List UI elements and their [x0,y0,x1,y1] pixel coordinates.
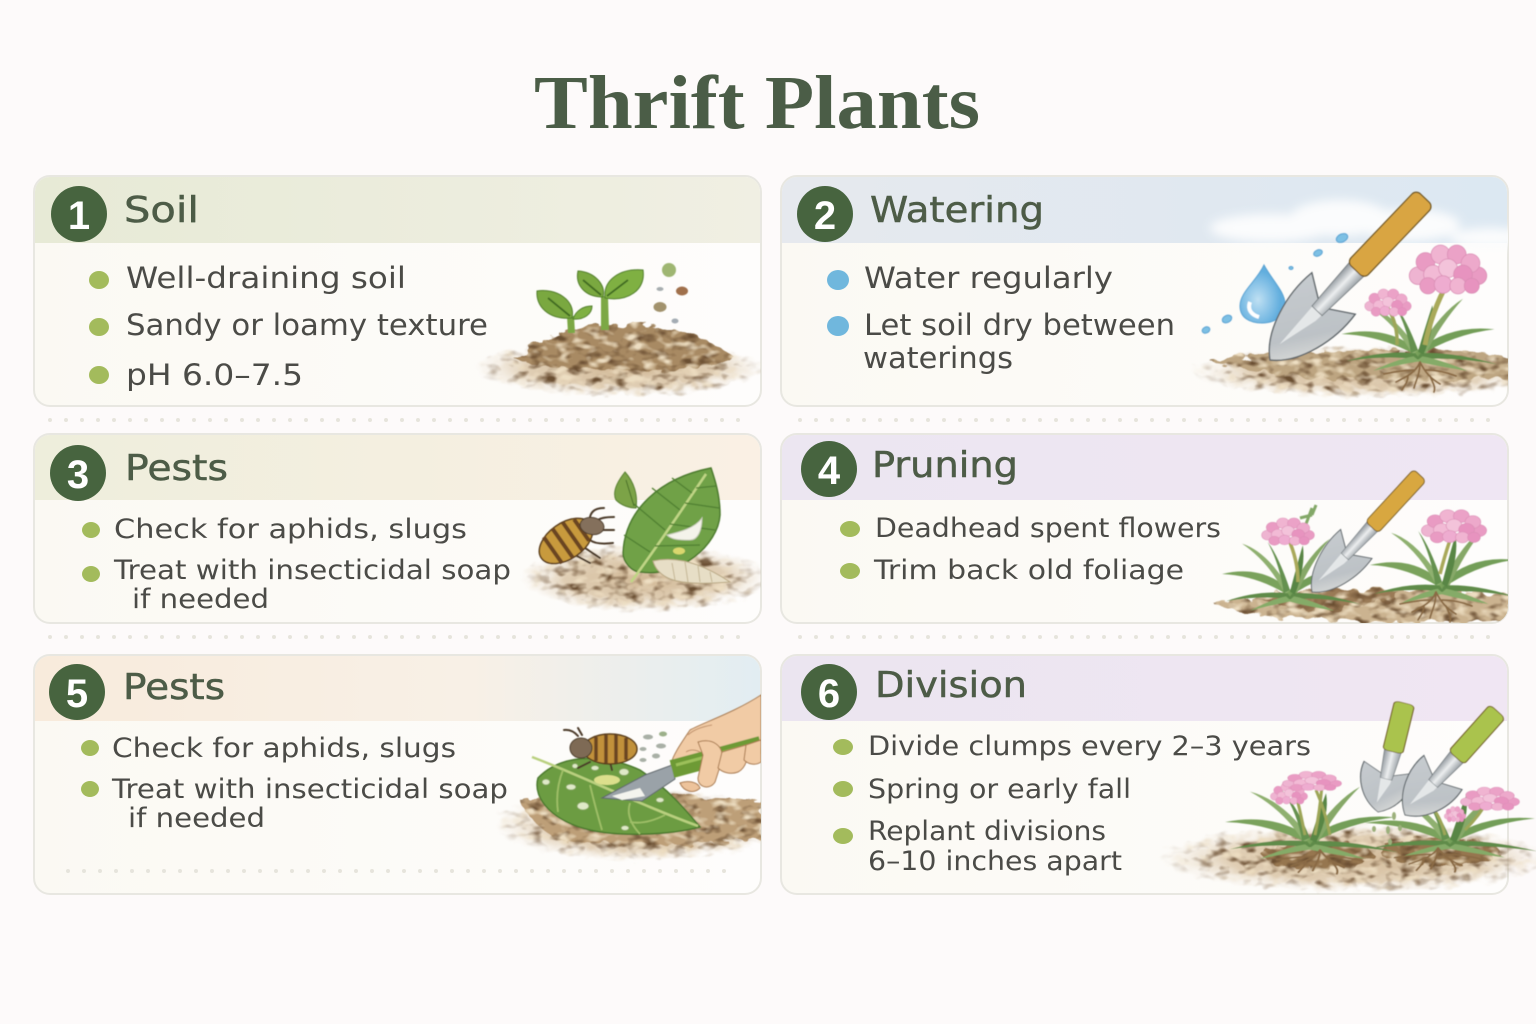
number badge 2 [797,186,853,242]
icon: beetle and chewed leaf [520,468,770,612]
number badge 6 [801,664,857,720]
heading: pruning: Pruning [872,445,1018,486]
number badge 4: 4 [818,449,841,493]
number badge 3 [50,445,106,501]
divider: row two dots [50,635,745,639]
divider: inner dots [68,869,730,873]
heading: soil: Soil [124,190,199,231]
bullet list: soil: Well-draining soil [126,261,406,295]
panel: soil [34,176,766,406]
panel: pests left [34,434,770,623]
bullet list: watering [827,261,1175,375]
number badge 1: 1 [68,194,90,238]
bullet list: division: Divide clumps every 2–3 years [868,731,1311,762]
bullet list: pest treatment: Treat with insecticidal soap [111,774,508,805]
bullet list: soil: Sandy or loamy texture [126,308,488,342]
divider: row one dots [50,418,745,422]
title: Thrift Plants [534,61,980,145]
bullet list: pest treatment: if needed [128,803,265,834]
bullet list: pruning [840,513,1221,586]
number badge 6: 6 [818,672,840,716]
number badge 3: 3 [67,453,89,497]
bullet list: watering: Let soil dry between [864,308,1175,342]
icon: divided thrift clumps with two trowels [1160,694,1536,892]
icon: trowel, water drop and thrift flower [1195,190,1508,400]
number badge 4 [801,441,857,497]
bullet list: soil [89,261,488,392]
number badge 5: 5 [66,672,88,716]
bullet list: division: 6–10 inches apart [868,846,1122,877]
bullet list: division: Replant divisions [868,816,1106,847]
panel: pests right leaf [34,655,785,894]
heading: pests: Pests [125,448,228,489]
panel: watering [781,176,1536,406]
bullet list: division: Spring or early fall [868,774,1131,805]
bullet list: watering: Water regularly [864,261,1113,295]
bullet list: pruning: Trim back old foliage [873,555,1184,586]
bullet list: pest treatment [81,733,508,834]
icon: seedling on soil mound [474,263,766,396]
bullet list: pests: if needed [132,584,269,615]
heading: division: Division [875,665,1027,706]
number badge 5 [49,664,105,720]
bullet list: division [833,731,1311,877]
bullet list: pruning: Deadhead spent flowers [875,513,1221,544]
bullet list: pests [82,514,511,615]
panel: division [781,655,1536,894]
number badge 2: 2 [814,194,836,238]
heading: watering: Watering [870,190,1044,231]
icon: trowel between two flowering thrift plants [1214,460,1517,622]
bullet list: pests: Check for aphids, slugs [114,514,467,545]
panel: pruning [781,434,1517,623]
clouds [1210,200,1530,248]
bullet list: pest treatment: Check for aphids, slugs [112,733,456,764]
number badge 1 [51,186,107,242]
bullet list: pests: Treat with insecticidal soap [113,555,511,586]
heading: pests: Pests [123,667,225,708]
bullet list: watering: waterings [863,341,1013,375]
icon: hand treating leaf with trowel and beetle [495,695,785,861]
bullet list: soil: pH 6.0–7.5 [126,358,303,392]
